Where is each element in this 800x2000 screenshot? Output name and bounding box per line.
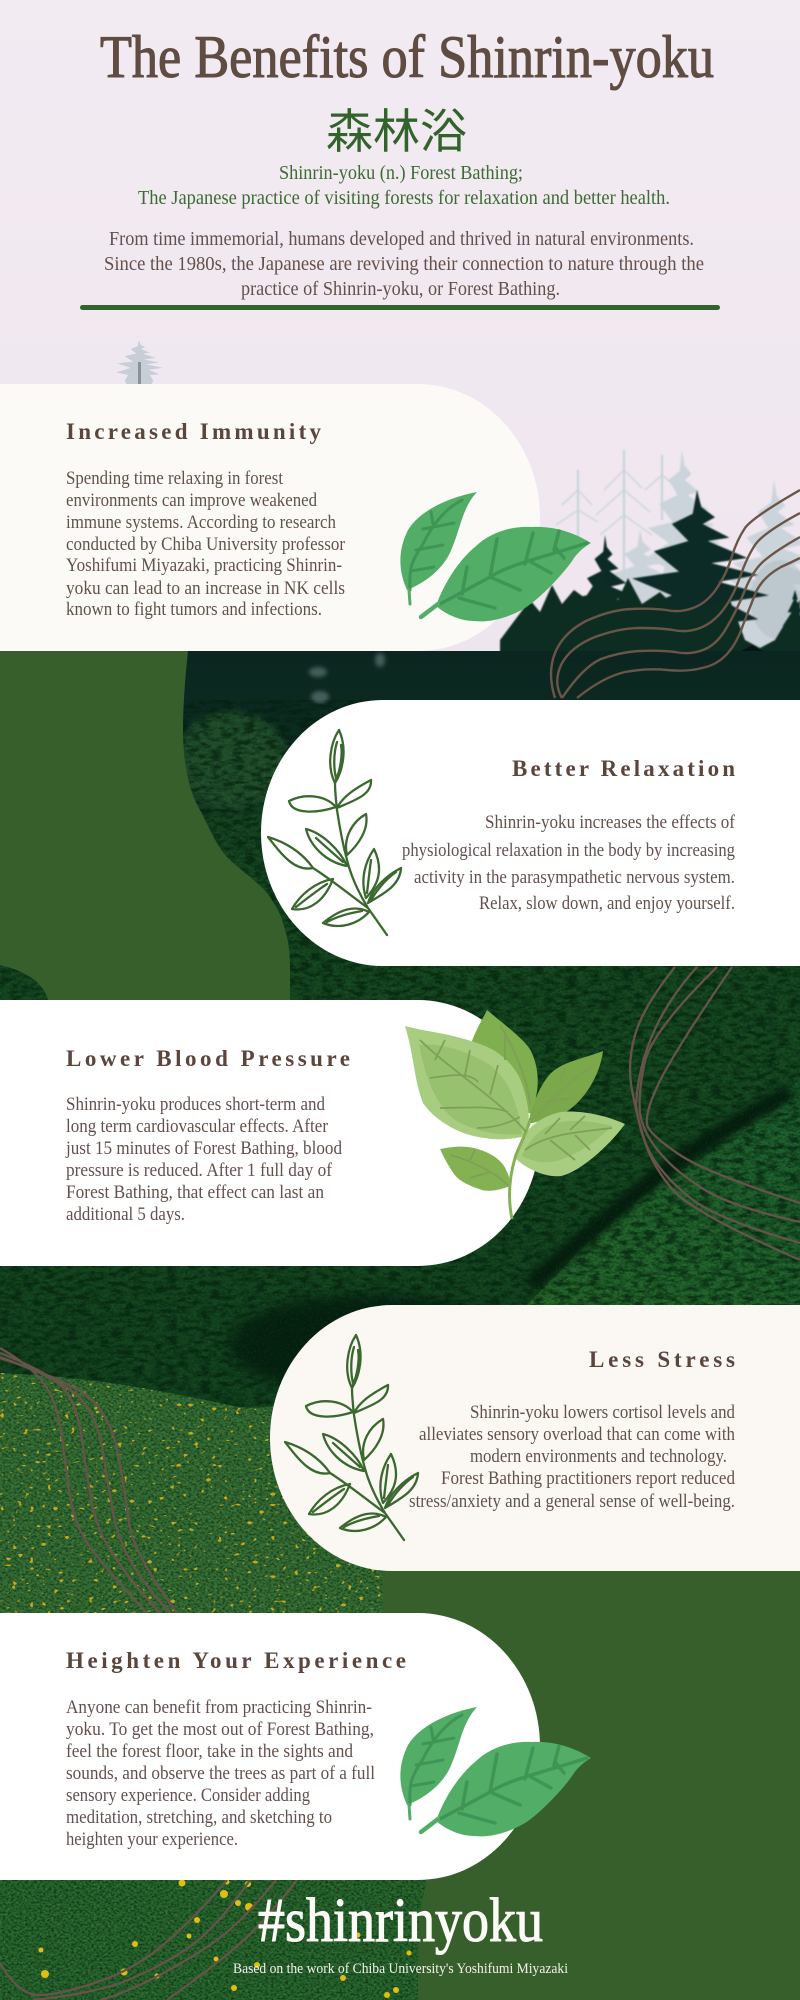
body text: Shinrin-yoku increases the effects of [485,812,736,833]
forest floor [0,651,800,826]
body text: meditation, stretching, and sketching to [66,1807,332,1828]
body text: yoku can lead to an increase in NK cells [66,578,345,599]
kanji title: 森林浴 [326,105,467,158]
grass blotches [0,700,800,1425]
body text: known to fight tumors and infections. [66,599,322,620]
grass slope [0,815,800,1425]
dark valley [530,1092,790,1285]
body text: sounds, and observe the trees as part of a full [66,1763,375,1784]
introduction paragraph [104,228,704,300]
body text: physiological relaxation in the body by increasing [402,840,735,861]
body text: pressure is reduced. After 1 full day of [66,1160,333,1181]
panel: increased immunity [0,384,591,651]
body text: sensory experience. Consider adding [66,1785,310,1806]
body text: environments can improve weakened [66,490,317,511]
lower grass [0,1875,440,2000]
heading: Lower Blood Pressure [66,1046,350,1071]
pale gaps in forest [309,653,385,703]
source credit: Based on the work of Chiba University's Yoshifumi Miyazaki [233,1961,568,1977]
icon: green leaves [400,1707,591,1836]
body text: additional 5 days. [66,1204,185,1225]
shadow under hill [230,1295,510,1395]
definition: The Japanese practice of visiting forests for relaxation and better health. [138,187,670,209]
body text: Yoshifumi Miyazaki, practicing Shinrin- [66,555,342,576]
body text: heighten your experience. [66,1829,238,1850]
bush [183,710,288,810]
flower meadow [0,1360,400,1620]
body text [65,1094,342,1225]
body text: Shinrin-yoku produces short-term and [66,1094,325,1115]
body text: just 15 minutes of Forest Bathing, blood [65,1138,342,1159]
dark ridge [655,645,800,710]
panel: heighten your experience [0,1613,591,1880]
decorative wavy lines: top right [551,490,800,698]
sky [0,0,800,700]
grass highlights [0,815,800,1425]
green block: lower right [383,1571,800,2000]
heading: Better Relaxation [512,756,735,781]
title: The Benefits of Shinrin-yoku [100,24,714,90]
introduction paragraph: practice of Shinrin-yoku, or Forest Bathing. [241,278,560,300]
heading: Less Stress [589,1347,735,1372]
dandelions [38,1880,412,1998]
body text: Relax, slow down, and enjoy yourself. [479,893,735,914]
body text: long term cardiovascular effects. After [66,1116,329,1137]
body text [402,812,736,914]
divider bar [80,305,720,310]
definition: Shinrin-yoku (n.) Forest Bathing; [279,162,523,184]
icon: colourful leaves [405,1010,625,1219]
body text: feel the forest floor, take in the sights and [66,1741,353,1762]
decorative wavy lines: bottom [0,1880,297,2000]
heading: Heighten Your Experience [66,1648,406,1673]
body text: activity in the parasympathetic nervous system. [414,867,735,888]
heading: Increased Immunity [66,419,322,444]
body text: yoku. To get the most out of Forest Bathing, [66,1719,374,1740]
icon: green leaves [400,492,591,621]
icon: outlined sprig [268,730,401,935]
panel: better relaxation [261,700,800,966]
grass fine texture [0,815,800,1425]
body text: Anyone can benefit from practicing Shinrin- [66,1697,372,1718]
body text: Forest Bathing, that effect can last an [66,1182,324,1203]
definition [138,162,670,209]
body text: conducted by Chiba University professor [66,534,346,555]
body text: immune systems. According to research [66,512,336,533]
introduction paragraph: Since the 1980s, the Japanese are reviving their connection to nature through the [104,253,704,275]
icon: outlined sprig [285,1335,418,1540]
hashtag: #shinrinyoku [258,1887,543,1955]
dark fir trees [500,490,800,700]
body text [66,468,346,620]
body text [409,1402,735,1512]
bright hillside [527,1080,800,1305]
body text [66,1697,375,1850]
body text: Spending time relaxing in forest [66,468,284,489]
body text: stress/anxiety and a general sense of well-being. [409,1491,735,1512]
misty trees [556,450,800,650]
body text: modern environments and technology. [470,1446,727,1467]
green blob: upper left [0,651,290,1000]
decorative wavy lines: lower left [0,1348,177,1613]
body text: Forest Bathing practitioners report reduced [441,1468,735,1489]
panel: less stress [270,1305,800,1571]
small distant tree [116,340,163,385]
body text: alleviates sensory overload that can come with [419,1424,735,1445]
panel: lower blood pressure [0,1000,625,1266]
body text: Shinrin-yoku lowers cortisol levels and [470,1402,735,1423]
decorative wavy lines: middle right [630,967,800,1260]
introduction paragraph: From time immemorial, humans developed and thrived in natural environments. [109,228,694,250]
